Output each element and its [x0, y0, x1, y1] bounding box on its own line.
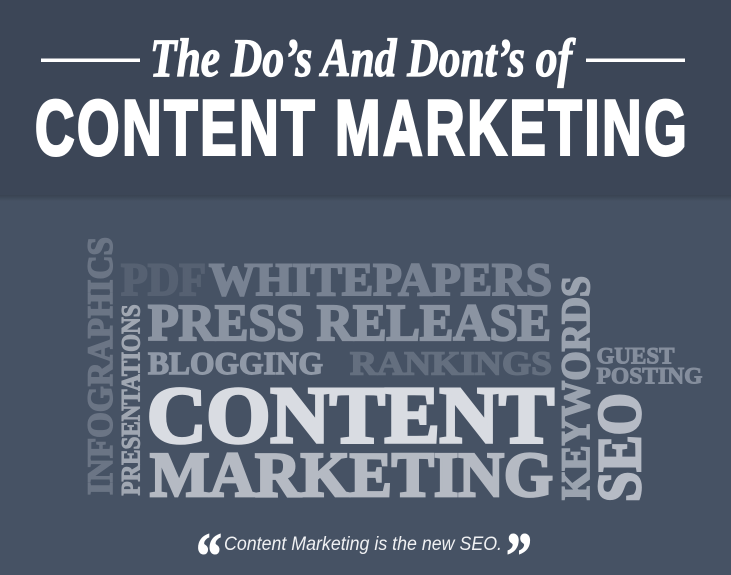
title: main heading: CONTENT MARKETING	[35, 85, 687, 172]
word: whitepapers: WHITEPAPERS	[209, 254, 552, 306]
word: presentations: PRESENTATIONS	[116, 304, 146, 496]
word: guest: GUEST	[596, 344, 674, 368]
title: script line: The Do’s And Dont’s of	[150, 28, 576, 88]
word: infographics: INFOGRAPHICS	[80, 237, 120, 495]
word: keywords: KEYWORDS	[553, 276, 598, 500]
word: marketing: MARKETING	[150, 440, 553, 510]
word: rankings: RANKINGS	[350, 346, 552, 382]
word: posting: POSTING	[596, 364, 703, 388]
word: content: CONTENT	[147, 370, 554, 460]
word: seo: SEO	[587, 393, 654, 502]
left title rule	[41, 58, 140, 62]
word cloud	[80, 237, 703, 510]
quote text: Content Marketing is the new SEO.	[224, 534, 502, 555]
quote	[196, 520, 532, 575]
right title rule	[586, 58, 685, 62]
word: blogging: BLOGGING	[148, 345, 323, 381]
word: pdf: PDF	[121, 254, 206, 306]
panel: header band	[0, 0, 731, 201]
word: press release: PRESS RELEASE	[148, 295, 551, 352]
